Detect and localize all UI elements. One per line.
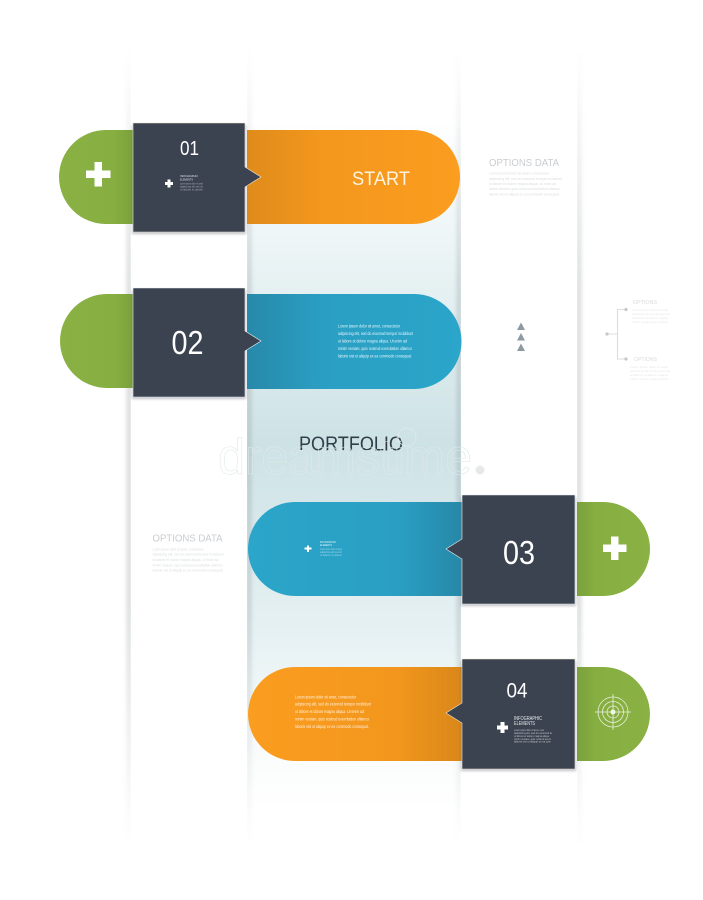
tree text: ut labore et dolore magna bbox=[630, 373, 668, 377]
card 04 bbox=[446, 659, 575, 769]
mini text 04: ut labore et dolore magna aliqua bbox=[514, 734, 549, 738]
vertical strip shadows bbox=[127, 50, 581, 845]
tree text: minim veniam quis nostrud bbox=[632, 320, 668, 324]
label: start: START bbox=[352, 169, 410, 190]
mini text 03 bbox=[320, 540, 343, 557]
center tinted panel bbox=[247, 120, 461, 810]
body text blue 02 bbox=[338, 324, 414, 358]
mini text 04: Lorem ipsum dolor sit amet, cons bbox=[514, 728, 544, 732]
small triangles bbox=[517, 322, 525, 351]
body: options data bbox=[489, 170, 563, 196]
mini text 04: INFOGRAPHIC bbox=[514, 716, 542, 722]
mini text 04 bbox=[514, 716, 552, 744]
tree text: adipiscing elit sed do eiusmod bbox=[632, 312, 670, 316]
card 03 bbox=[446, 495, 575, 604]
step 03 bbox=[248, 495, 650, 606]
body: options data: minim veniam, quis nostrud exercitation ullamco bbox=[489, 186, 561, 191]
body: options data left: ut labore et dolore magna aliqua. Ut enim ad bbox=[152, 557, 218, 562]
mini text 01: Lorem ipsum dolor sit amet bbox=[180, 182, 203, 186]
pill: blue 03 bbox=[248, 502, 462, 596]
mini text 03: ut labore et dolore bbox=[320, 554, 343, 557]
icon: plus card 01 bbox=[165, 180, 173, 188]
mini text 01: adipiscing elit sed do bbox=[180, 186, 204, 188]
options data left bbox=[152, 534, 224, 572]
step 04 bbox=[248, 659, 650, 771]
body text blue 02: minim veniam, quis nostrud exercitation ullamco bbox=[338, 346, 412, 351]
body: options data left: Lorem ipsum dolor sit amet, consectetur bbox=[152, 546, 204, 552]
card shadow 01 bbox=[132, 125, 246, 234]
body text orange 04: Lorem ipsum dolor sit amet, consectetur bbox=[295, 694, 356, 700]
tree text: adipiscing elit sed do eiusmod bbox=[630, 369, 670, 373]
tree connector bbox=[607, 310, 626, 359]
body text orange 04: laboris nisi ut aliquip ex ea commodo consequat. bbox=[295, 724, 369, 729]
pill: green 04 bbox=[577, 667, 650, 761]
body: options data left: adipiscing elit, sed do eiusmod tempor incididunt bbox=[152, 552, 224, 556]
card shadow 04 bbox=[461, 661, 576, 771]
mini text 01: ut labore et dolore bbox=[180, 188, 204, 192]
body: options data: laboris nisi ut aliquip ex ea commodo consequat. bbox=[489, 192, 560, 196]
card shadow 03 bbox=[461, 497, 576, 606]
body: options data: adipiscing elit, sed do eiusmod tempor incididunt bbox=[489, 176, 563, 181]
mini text 03: INFOGRAPHIC bbox=[320, 540, 337, 544]
icon: plus blue 03 bbox=[304, 546, 312, 552]
body text orange 04: adipiscing elit, sed do eiusmod tempor incididunt bbox=[295, 702, 372, 706]
mini text 04: minim veniam, quis nostrud exerc bbox=[514, 737, 551, 741]
card 01 bbox=[133, 123, 261, 232]
heading: options data left: OPTIONS DATA bbox=[152, 534, 223, 544]
pill: orange 04 bbox=[248, 667, 462, 761]
body: options data left: minim veniam, quis nostrud exercitation ullamco bbox=[152, 562, 223, 568]
icon: plus card 04 bbox=[497, 722, 508, 733]
mini text 03: adipiscing elit sed do bbox=[320, 551, 343, 554]
number 03: 03 bbox=[503, 534, 535, 571]
number 02: 02 bbox=[172, 324, 204, 361]
body: options data: Lorem ipsum dolor sit amet, consectetur bbox=[489, 170, 550, 176]
heading: portfolio: PORTFOLIO bbox=[299, 434, 403, 456]
body: options data left bbox=[152, 546, 224, 572]
body text orange 04 bbox=[295, 694, 372, 729]
step 01 bbox=[59, 123, 460, 234]
tree text bbox=[630, 300, 670, 381]
body text orange 04: minim veniam, quis nostrud exercitation ullamco bbox=[295, 716, 369, 722]
tree text: Lorem ipsum dolor sit amet bbox=[632, 308, 668, 312]
icon: plus green 03 bbox=[603, 536, 626, 560]
mini text 01: ELEMENTS bbox=[180, 178, 193, 182]
pill: green 03 bbox=[577, 502, 650, 596]
pill: blue 02 bbox=[247, 294, 462, 389]
mini text 01 bbox=[180, 174, 204, 192]
number 04: 04 bbox=[506, 680, 528, 702]
tree text: OPTIONS bbox=[633, 300, 657, 306]
pill: green 02 bbox=[60, 294, 133, 388]
pill: orange start bbox=[247, 130, 460, 224]
tree text: OPTIONS bbox=[634, 357, 657, 363]
mini text 04: ELEMENTS bbox=[514, 721, 536, 727]
number 01: 01 bbox=[180, 138, 199, 160]
strip 2 body mask bbox=[461, 40, 577, 850]
body: options data left: laboris nisi ut aliquip ex ea commodo consequat. bbox=[152, 568, 224, 572]
icon: plus green 01 bbox=[86, 162, 110, 186]
body text blue 02: laboris nisi ut aliquip ex ea commodo consequat. bbox=[338, 354, 412, 358]
body text orange 04: ut labore et dolore magna aliqua. Ut enim ad bbox=[295, 709, 364, 714]
mini text 01: INFOGRAPHIC bbox=[180, 174, 199, 178]
mini text 04: laboris nisi ut aliquip ex ea com bbox=[514, 740, 551, 744]
tree text: ut labore et dolore magna bbox=[632, 316, 668, 320]
watermark: dreamstime bbox=[218, 429, 472, 485]
options tree far right bbox=[605, 300, 670, 381]
icon: target bbox=[595, 694, 631, 730]
strip 1 body mask bbox=[131, 40, 247, 850]
body: options data: ut labore et dolore magna aliqua. Ut enim ad bbox=[489, 181, 556, 186]
mini text 04: adipiscing elit, sed do eiusmod te bbox=[514, 731, 552, 735]
tree text: Lorem ipsum dolor sit amet bbox=[630, 365, 668, 369]
body text blue 02: Lorem ipsum dolor sit amet, consectetur bbox=[338, 324, 400, 328]
mini text 03: ELEMENTS bbox=[320, 543, 332, 547]
options data top right bbox=[489, 158, 563, 196]
body text blue 02: ut labore et dolore magna aliqua. Ut enim ad bbox=[338, 338, 407, 344]
card shadow 02 bbox=[132, 290, 246, 399]
step 02 bbox=[60, 288, 462, 399]
body text blue 02: adipiscing elit, sed do eiusmod tempor incididunt bbox=[338, 331, 414, 336]
pill: green 01 bbox=[59, 130, 133, 224]
heading: options data: OPTIONS DATA bbox=[489, 158, 559, 169]
card 02 bbox=[133, 288, 261, 397]
tree text: minim veniam quis nostrud bbox=[630, 377, 668, 381]
mini text 03: Lorem ipsum dolor sit amet bbox=[320, 548, 342, 551]
